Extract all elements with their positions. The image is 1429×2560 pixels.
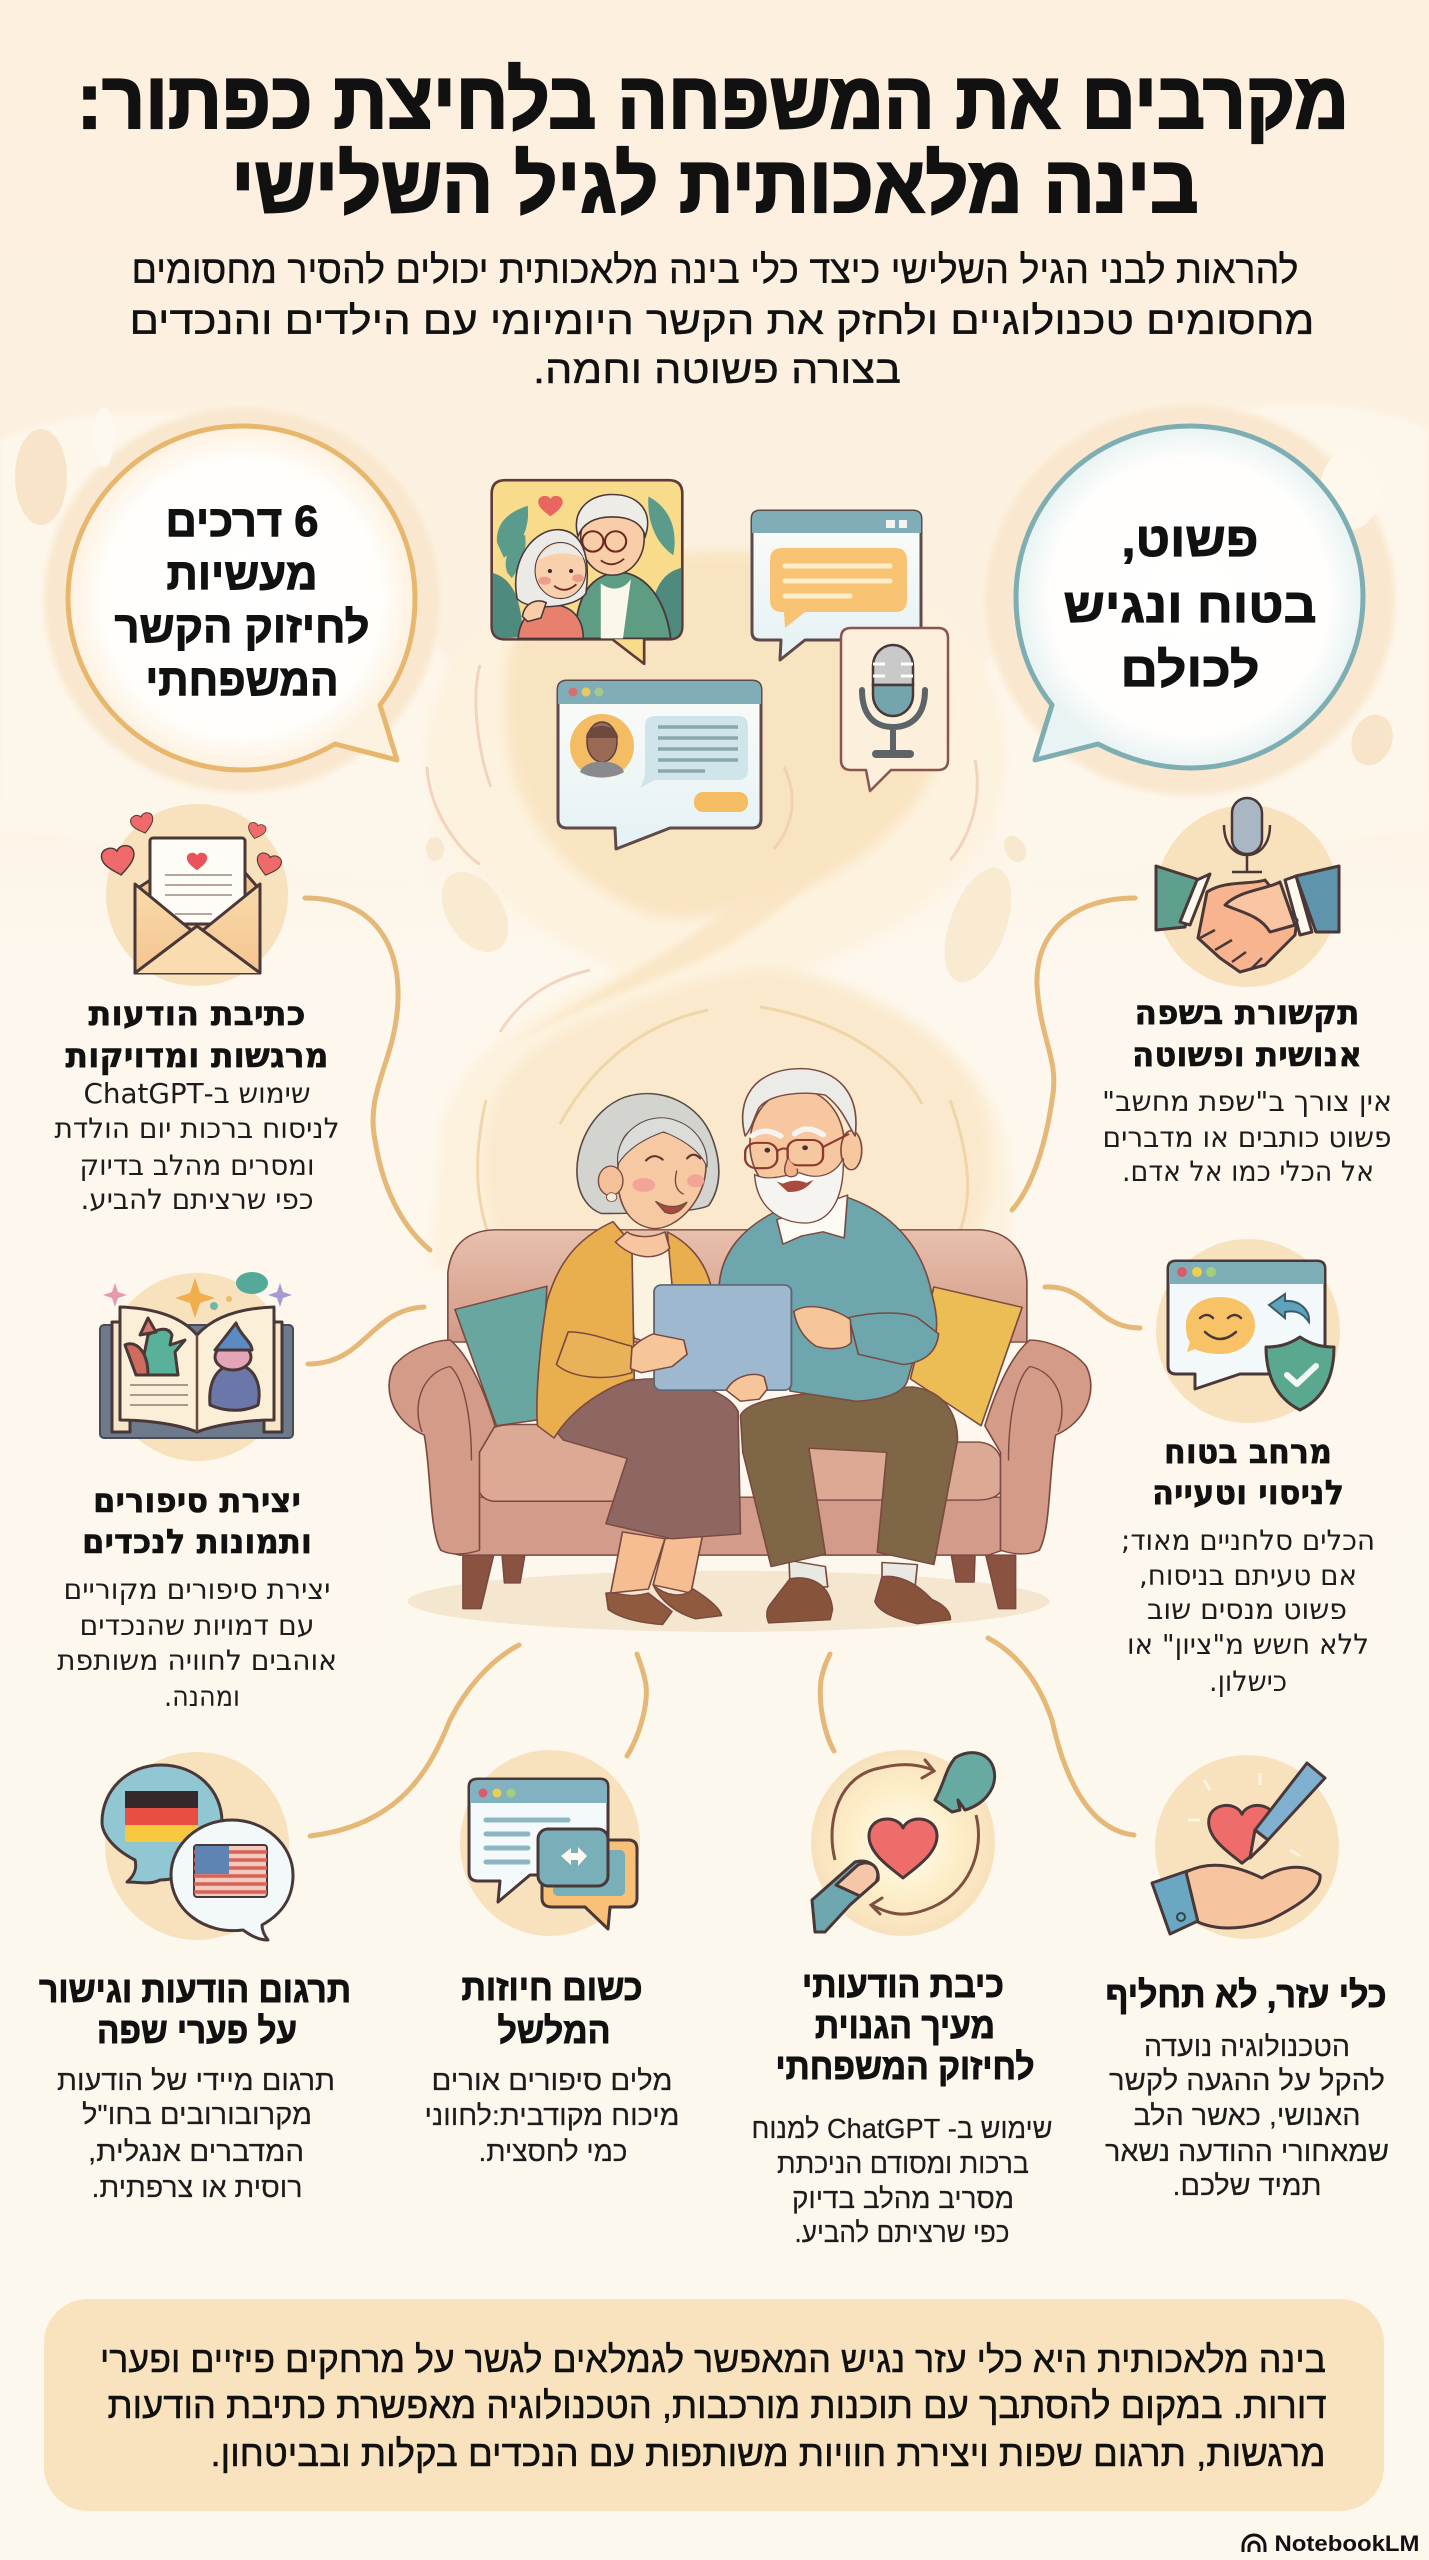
heading: [462, 1967, 642, 2051]
heading: [39, 1969, 351, 2051]
icon: handshake with microphone: [1156, 798, 1339, 987]
heading: מעיך הגנוית: [815, 2005, 995, 2046]
speech bubble: simple, safe, accessible: פשוט,: [1122, 514, 1258, 567]
text block: ללא חשש מ"ציון" או: [1127, 1628, 1369, 1661]
summary panel: מרגשות, תרגום שפות ויצירת חוויות משותפות עם הנכדים בקלות ובביטחון.: [210, 2433, 1326, 2474]
text block: ומסרים מהלב בדיוק: [80, 1149, 314, 1182]
heading: ותמונות לנכדים: [82, 1522, 312, 1562]
icon: microphone card: [841, 628, 948, 791]
text block: כפי שרציתם להביע.: [794, 2217, 1010, 2248]
icon: hand holding heart and pen: [1152, 1755, 1339, 1939]
speech bubble: simple, safe, accessible: [1016, 426, 1363, 768]
text block: לניסוח ברכות יום הולדת: [54, 1112, 340, 1145]
text block: יצירת סיפורים מקוריים: [64, 1573, 330, 1606]
heading: תקשורת בשפה: [1134, 993, 1360, 1033]
text block: [57, 2065, 335, 2203]
icon: open story book: [100, 1272, 293, 1461]
text block: ברכות ומסודם הניכתת: [777, 2148, 1029, 2179]
icon: profile browser card: [558, 681, 761, 849]
item: story browser: [424, 1750, 680, 2167]
heading: [1132, 993, 1362, 1075]
title: בינה מלאכותית לגיל השלישי: [232, 140, 1198, 229]
heading: [1152, 1432, 1344, 1513]
text block: הכלים סלחניים מאוד;: [1121, 1524, 1375, 1557]
text block: תמיד שלכם.: [1172, 2170, 1322, 2201]
summary panel: בינה מלאכותית היא כלי עזר נגיש המאפשר לגמלאים לגשר על מרחקים פיזיים ופערי: [100, 2339, 1326, 2380]
heading: [776, 1964, 1034, 2087]
text block: כמי לחסצית.: [478, 2136, 628, 2167]
subtitle: להראות לבני הגיל השלישי כיצד כלי בינה מלאכותית יכולים להסיר מחסומים: [132, 249, 1298, 292]
subtitle: בצורה פשוטה וחמה.: [533, 349, 901, 392]
text block: רוסית או צרפתית.: [92, 2172, 302, 2203]
heading: לניסוי וטעייה: [1152, 1473, 1344, 1513]
icon: envelope with letter and hearts: [100, 804, 288, 986]
heading: כשום חיוזות: [462, 1967, 642, 2008]
heading: מרגשות ומדויקות: [66, 1036, 328, 1076]
speech bubble: six practical ways: המשפחתי: [146, 656, 338, 705]
text block: מסריב מהלב בדיוק: [792, 2183, 1014, 2214]
wisps: [427, 665, 977, 1032]
text block: שמאחורי ההודעה נשאר: [1105, 2136, 1389, 2167]
subtitle: [130, 249, 1314, 392]
item: safe space to try: [1121, 1239, 1375, 1698]
NotebookLM logo: NotebookLM: [1274, 2531, 1420, 2556]
icon: chat window: [752, 511, 921, 660]
item: human simple communication: [1102, 798, 1392, 1188]
heading: [66, 994, 328, 1076]
subtitle: מחסומים טכנולוגיים ולחזק את הקשר היומיומי עם הילדים והנכדים: [130, 300, 1314, 343]
text block: האנושי, כאשר הלב: [1134, 2100, 1360, 2131]
text block: [1121, 1524, 1375, 1698]
text block: מיכוח מקודבית:לחווני: [424, 2100, 680, 2131]
teal pillow: [455, 1286, 547, 1426]
speech bubble: simple, safe, accessible: בטוח ונגיש: [1064, 580, 1316, 633]
text block: [1105, 2031, 1389, 2201]
hourglass glow: [426, 545, 1010, 1270]
text block: פשוט מנסים שוב: [1147, 1593, 1347, 1626]
heading: אנושית ופשוטה: [1132, 1035, 1362, 1075]
item: translation: [39, 1752, 351, 2203]
heading: על פערי שפה: [97, 2010, 297, 2051]
item: helper tool, not a replacement: [1105, 1755, 1389, 2201]
heading: מרחב בטוח: [1164, 1432, 1332, 1472]
speech bubble: six practical ways: 6 דרכים: [166, 497, 318, 546]
text block: אין צורך ב"שפת מחשב": [1102, 1085, 1392, 1118]
text block: אוהבים לחוויה משותפת: [57, 1644, 337, 1677]
text block: ומהנה.: [164, 1680, 240, 1713]
title: מקרבים את המשפחה בלחיצת כפתור:: [77, 56, 1349, 145]
text block: עם דמויות שהנכדים: [80, 1609, 314, 1642]
text block: המדברים אנגלית,: [88, 2136, 304, 2167]
text block: הטכנולוגיה נועדה: [1144, 2031, 1350, 2062]
text block: שימוש ב-ChatGPT: [84, 1077, 311, 1110]
text block: להקל על ההגעה לקשר: [1109, 2065, 1385, 2096]
heading: המלשל: [498, 2010, 610, 2051]
text block: [1102, 1085, 1392, 1188]
summary panel: [44, 2299, 1384, 2511]
floor shadow: [408, 1571, 1050, 1632]
heading: לחיזוק המשפחתי: [776, 2046, 1034, 2087]
text block: [752, 2113, 1052, 2248]
text block: שימוש ב- ChatGPT למנוח: [752, 2113, 1052, 2144]
man: [719, 1069, 958, 1624]
text block: מלים סיפורים אורים: [432, 2065, 672, 2096]
text block: כישלון.: [1209, 1665, 1287, 1698]
item: stories for grandchildren: [57, 1272, 337, 1713]
text block: אם טעיתם בניסוח,: [1139, 1559, 1357, 1592]
item: emotional messages: [54, 804, 340, 1216]
cream ovals: [428, 860, 522, 964]
text block: אל הכלי כמו אל אדם.: [1122, 1155, 1374, 1188]
icon: heart in cycle with finger and bird: [811, 1750, 995, 1936]
illustration: elderly couple on a sofa with a tablet: [389, 1069, 1091, 1632]
text block: תרגום מיידי של הודעות: [57, 2065, 335, 2096]
text block: פשוט כותבים או מדברים: [1102, 1121, 1392, 1154]
woman: [537, 1094, 740, 1625]
heading: [82, 1481, 312, 1562]
hands: [630, 1334, 767, 1401]
speech bubble: six practical ways: לחיזוק הקשר: [114, 603, 370, 652]
text block: [57, 1573, 337, 1713]
heading: כלי עזר, לא תחליף: [1106, 1974, 1386, 2015]
heading: כיבת הודעותי: [802, 1964, 1004, 2005]
heading: כתיבת הודעות: [88, 994, 306, 1034]
speech bubble: simple, safe, accessible: לכולם: [1120, 644, 1260, 697]
text block: מקרובורובים בחו"ל: [82, 2099, 312, 2130]
icon: chat window with smile and shield: [1156, 1239, 1340, 1423]
icon: browser with chat bubbles: [460, 1750, 640, 1936]
summary panel: דורות. במקום להסתבך עם תוכנות מורכבות, הטכנולוגיה מאפשרת כתיבת הודעות: [108, 2385, 1326, 2426]
text block: כפי שרציתם להביע.: [80, 1183, 314, 1216]
heading: תרגום הודעות וגישור: [39, 1969, 351, 2010]
sofa: [389, 1230, 1091, 1609]
heading: יצירת סיפורים: [93, 1481, 301, 1521]
speech bubble: six practical ways: מעשיות: [166, 550, 318, 599]
connector curves: [305, 898, 1140, 1836]
title: [77, 56, 1349, 229]
yellow pillow: [910, 1287, 1022, 1426]
icon: grandparents photo card: [492, 480, 682, 664]
item: garden city messages: [752, 1750, 1052, 2248]
text block: [424, 2065, 680, 2167]
icon: flag speech bubbles: [102, 1752, 293, 1940]
speech bubble: six practical ways: [68, 426, 415, 770]
text block: [54, 1077, 340, 1216]
tablet: [654, 1285, 791, 1390]
background blobs: [0, 404, 1429, 1270]
